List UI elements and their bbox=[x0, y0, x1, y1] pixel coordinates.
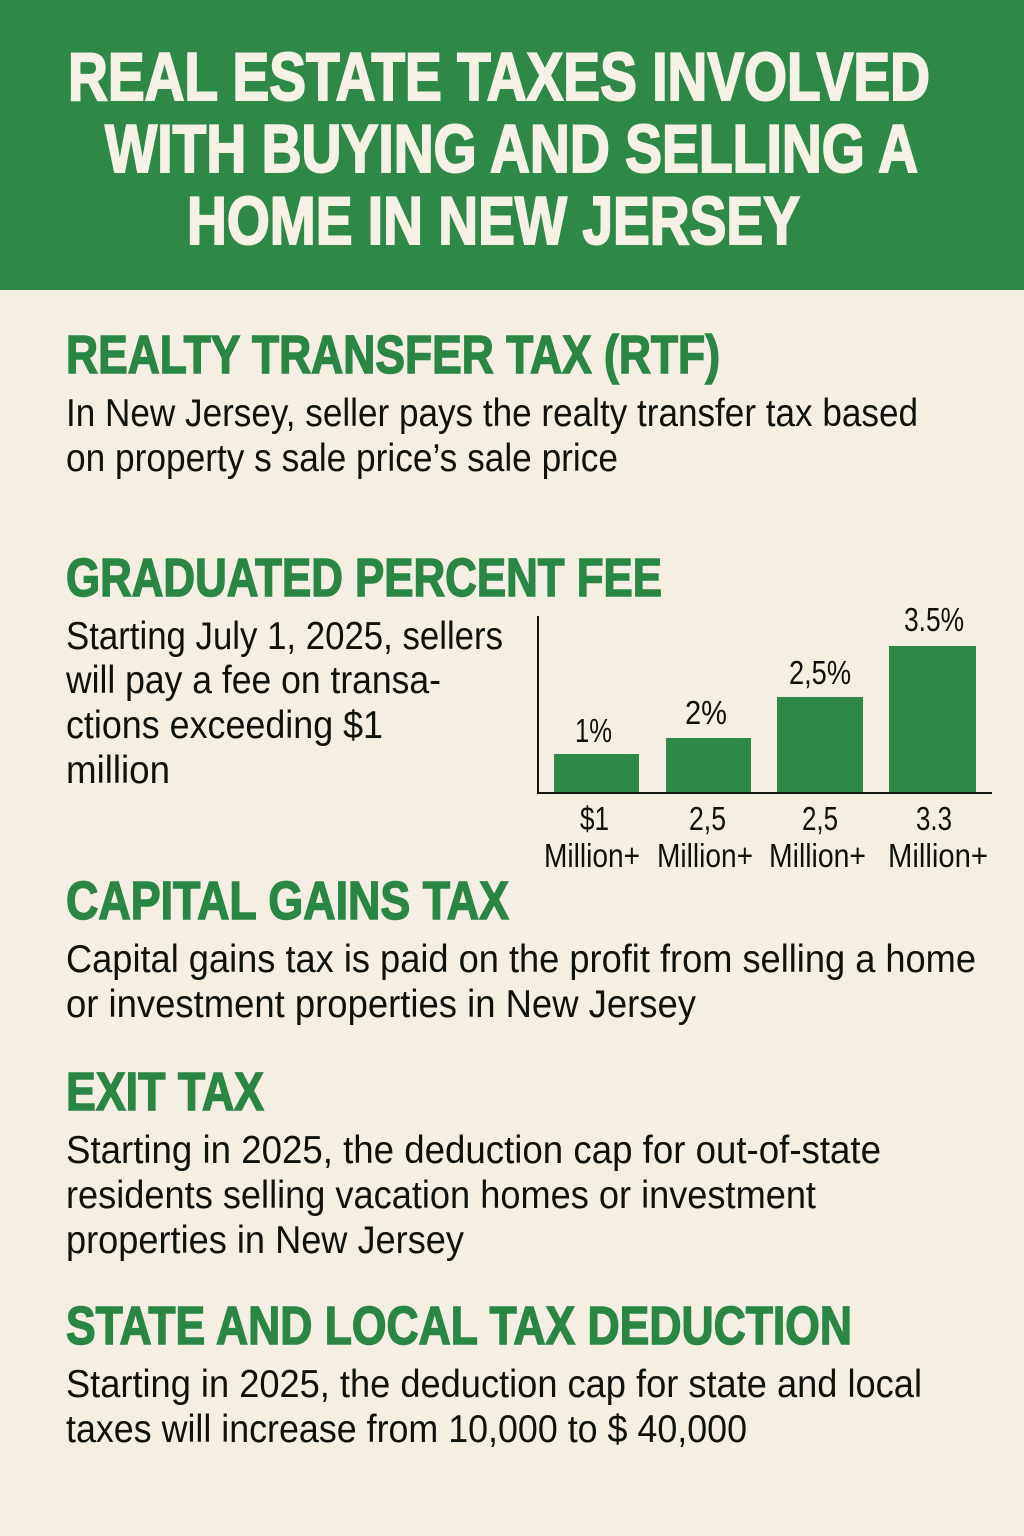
text block: exit tax: residents selling vacation homes or investment bbox=[66, 1174, 816, 1217]
bar: 2.5 million+ at 2.5%: 2,5% bbox=[789, 654, 851, 691]
text block: realty transfer tax: on property s sale price’s sale price bbox=[66, 437, 618, 480]
text block: exit tax: Starting in 2025, the deduction cap for out-of-state bbox=[66, 1129, 881, 1172]
text block: capital gains tax: Capital gains tax is paid on the profit from selling a home bbox=[66, 938, 976, 981]
panel: capital gains tax bbox=[66, 871, 976, 1026]
bar: $1 million+ bbox=[544, 712, 640, 874]
bar: 3.3 million+: 3.5% bbox=[904, 601, 964, 638]
text block: graduated percent fee: million bbox=[66, 749, 170, 792]
bar: 2.5 million+ at 2%: 2% bbox=[685, 694, 727, 731]
bar: 3.3 million+: Million+ bbox=[888, 837, 988, 874]
panel: graduated percent fee bbox=[65, 548, 992, 874]
text block: exit tax: properties in New Jersey bbox=[66, 1219, 464, 1262]
bar: $1 million+: $1 bbox=[580, 800, 609, 837]
bar: 2.5 million+ at 2.5%: 2,5 bbox=[802, 800, 838, 837]
bar: 2.5 million+ at 2.5% bbox=[769, 654, 866, 874]
text block: state and local tax deduction: Starting in 2025, the deduction cap for state and local bbox=[66, 1363, 922, 1406]
bar: $1 million+: 1% bbox=[575, 712, 612, 749]
bar: 2.5 million+ at 2%: Million+ bbox=[657, 837, 753, 874]
panel: realty transfer tax bbox=[66, 325, 918, 480]
title bbox=[68, 39, 930, 259]
panel: exit tax bbox=[66, 1062, 881, 1262]
text block: realty transfer tax bbox=[66, 392, 918, 480]
heading: graduated percent fee: GRADUATED PERCENT FEE bbox=[66, 548, 662, 608]
heading: capital gains tax: CAPITAL GAINS TAX bbox=[66, 871, 509, 931]
bar: 2.5 million+ at 2%: 2,5 bbox=[689, 800, 726, 837]
text block: exit tax bbox=[66, 1129, 881, 1262]
text block: state and local tax deduction bbox=[66, 1363, 922, 1451]
chart axes bbox=[538, 616, 992, 793]
bar chart bbox=[538, 601, 992, 874]
text block: state and local tax deduction: taxes will increase from 10,000 to $ 40,000 bbox=[66, 1408, 747, 1451]
panel: state and local tax deduction bbox=[66, 1296, 922, 1451]
bar: $1 million+: Million+ bbox=[544, 837, 640, 874]
bar: 3.3 million+ bbox=[888, 601, 988, 874]
text block: graduated percent fee bbox=[65, 615, 503, 792]
heading: realty transfer tax: REALTY TRANSFER TAX (RTF) bbox=[66, 325, 720, 385]
bar: 2.5 million+ at 2.5%: Million+ bbox=[769, 837, 866, 874]
text block: capital gains tax bbox=[66, 938, 976, 1026]
heading: exit tax: EXIT TAX bbox=[66, 1062, 264, 1122]
title banner bbox=[0, 0, 1024, 290]
text block: graduated percent fee: Starting July 1, 2025, sellers bbox=[66, 615, 503, 658]
text block: graduated percent fee: will pay a fee on transa- bbox=[65, 659, 441, 702]
heading: state and local tax deduction: STATE AND LOCAL TAX DEDUCTION bbox=[66, 1296, 852, 1356]
bar: 3.3 million+: 3.3 bbox=[916, 800, 952, 837]
bar: 2.5 million+ at 2% bbox=[657, 694, 753, 874]
text block: realty transfer tax: In New Jersey, seller pays the realty transfer tax based bbox=[66, 392, 918, 435]
text block: capital gains tax: or investment properties in New Jersey bbox=[66, 983, 696, 1026]
title: HOME IN NEW JERSEY bbox=[187, 183, 800, 259]
text block: graduated percent fee: ctions exceeding $1 bbox=[66, 704, 383, 747]
